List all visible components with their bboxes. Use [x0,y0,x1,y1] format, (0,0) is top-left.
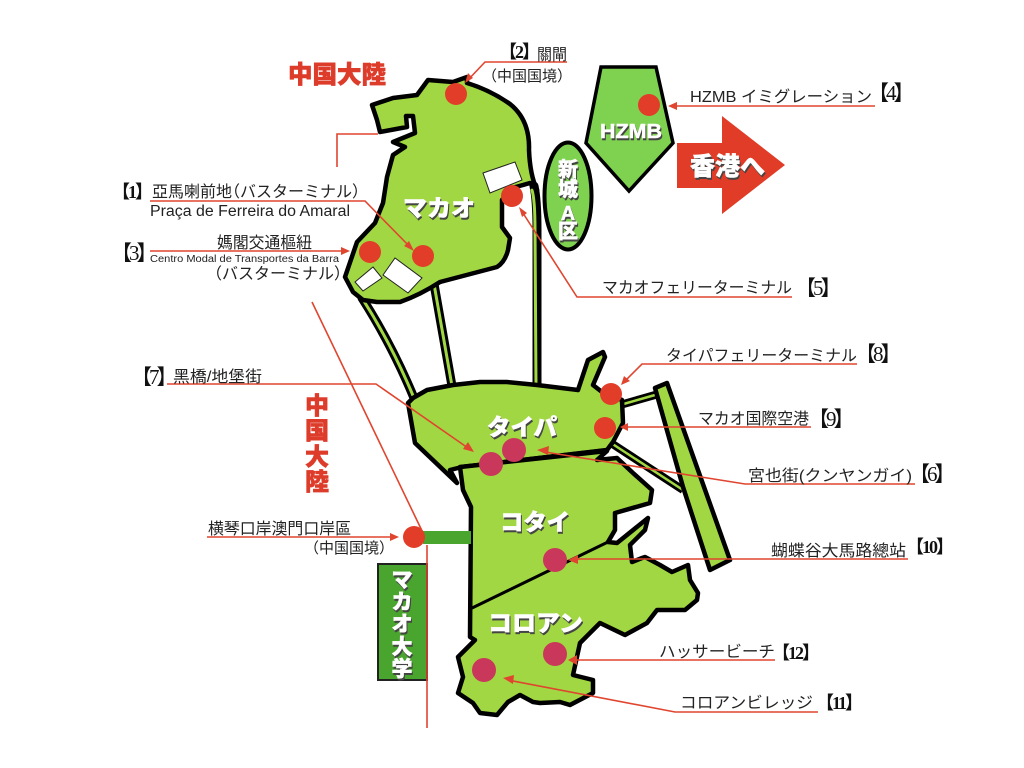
connector to Hengqin [423,531,471,544]
callout 2: 【2】 [499,42,538,62]
map: islands and bridges [345,67,730,715]
heading: mainland China, vertical: 陸 [305,469,329,496]
label: Taipa: タイパ [487,414,557,440]
callout 8: タイパフェリーターミナル [666,347,857,365]
callout 2: 關閘 [537,47,567,64]
callout 8: 【8】 [855,342,898,366]
heading: mainland China, vertical: 中 [305,393,329,420]
panel: University of Macau: 大 [392,636,412,659]
callout 4 [638,81,912,116]
boundary: Taipa and Cotai [460,450,607,467]
label: Xincheng A: 新 [558,158,578,181]
callout 5 [501,185,838,300]
callout 1 [112,182,434,267]
callout 1: 【1】 [112,182,151,202]
callout 1: 亞馬喇前地 [152,183,232,201]
callout 12: 【12】 [772,643,818,663]
callout 12: ハッサービーチ [659,643,775,661]
callout 1: Praça de Ferreira do Amaral [150,203,350,220]
callout 11: コロアンビレッジ [680,694,813,712]
heading: mainland China, vertical: 国 [305,418,329,445]
callout 11 [472,658,861,713]
land: Macau peninsula [345,77,537,302]
label: Cotai: コタイ [500,509,570,535]
island: Shincheng A zone [544,142,592,250]
land: airport runway [655,383,730,570]
callout 7: 【7】 [131,365,174,389]
callout 5: マカオフェリーターミナル [602,279,792,297]
callout 3: 【3】 [111,241,154,265]
callout 9: 【9】 [808,407,852,431]
label: HZMB: HZMB [600,121,662,143]
callout 6: 【6】 [909,462,952,486]
callout 3: （バスターミナル） [206,265,350,283]
callout: Hengqin port: （中国国境） [304,540,394,557]
callout 8 [600,342,898,405]
airport connectors [611,395,683,490]
island: HZMB [586,67,673,191]
callout 4: HZMB イミグレーション [690,88,872,106]
callout 9: マカオ国際空港 [698,410,809,428]
callout 4: 【4】 [868,81,912,105]
land: Cotai and Coloane [458,451,698,715]
heading: mainland China, horizontal: 中国大陸 [288,61,386,89]
panel: University of Macau: 学 [392,657,412,681]
callout: Hengqin port: 横琴口岸澳門口岸區 [208,520,351,538]
heading: mainland China, vertical: 大 [305,444,329,471]
panel: University of Macau [378,564,427,681]
label: Xincheng A: 区 [558,221,578,243]
label: Xincheng A: A [561,203,575,225]
callout 10 [543,537,952,572]
callout 7: 黑橋/地堡街 [173,368,262,386]
border lines [312,134,427,728]
land: Taipa [408,352,623,483]
boundary: Cotai and Coloane [470,541,610,609]
arrow: to Hong Kong: 香港へ [690,153,765,181]
callout 3 [111,234,381,283]
label: Coloane: コロアン [488,610,583,636]
callout 2 [445,42,572,105]
white buildings [355,162,522,293]
panel: University of Macau: オ [392,613,412,636]
region labels [403,121,662,636]
arrow: to Hong Kong [677,116,785,214]
label: Xincheng A: 城 [558,177,578,201]
label: Macau: マカオ [403,195,475,221]
callout: Hengqin port [207,520,425,557]
callout 1: （バスターミナル） [224,183,368,201]
callout 5: 【5】 [795,276,838,300]
bridges between Macau and Taipa [362,186,537,398]
callout 6 [502,438,952,486]
callout 10: 蝴蝶谷大馬路總站 [771,542,906,560]
callout 10: 【10】 [906,537,952,557]
heading: mainland China, vertical [305,393,329,496]
callout 11: 【11】 [816,693,861,713]
callout 3: 媽閣交通樞紐 [217,234,312,252]
label: Xincheng A [558,158,578,243]
callout 2: （中国国境） [482,68,572,85]
panel: University of Macau: マ [392,569,412,592]
callout 12 [543,642,818,666]
callout 7 [131,365,503,476]
callout 3: Centro Modal de Transportes da Barra [150,254,339,265]
callout 6: 宮也街(クンヤンガイ) [748,467,912,485]
panel: University of Macau: カ [392,591,412,614]
callout 9 [594,407,852,439]
